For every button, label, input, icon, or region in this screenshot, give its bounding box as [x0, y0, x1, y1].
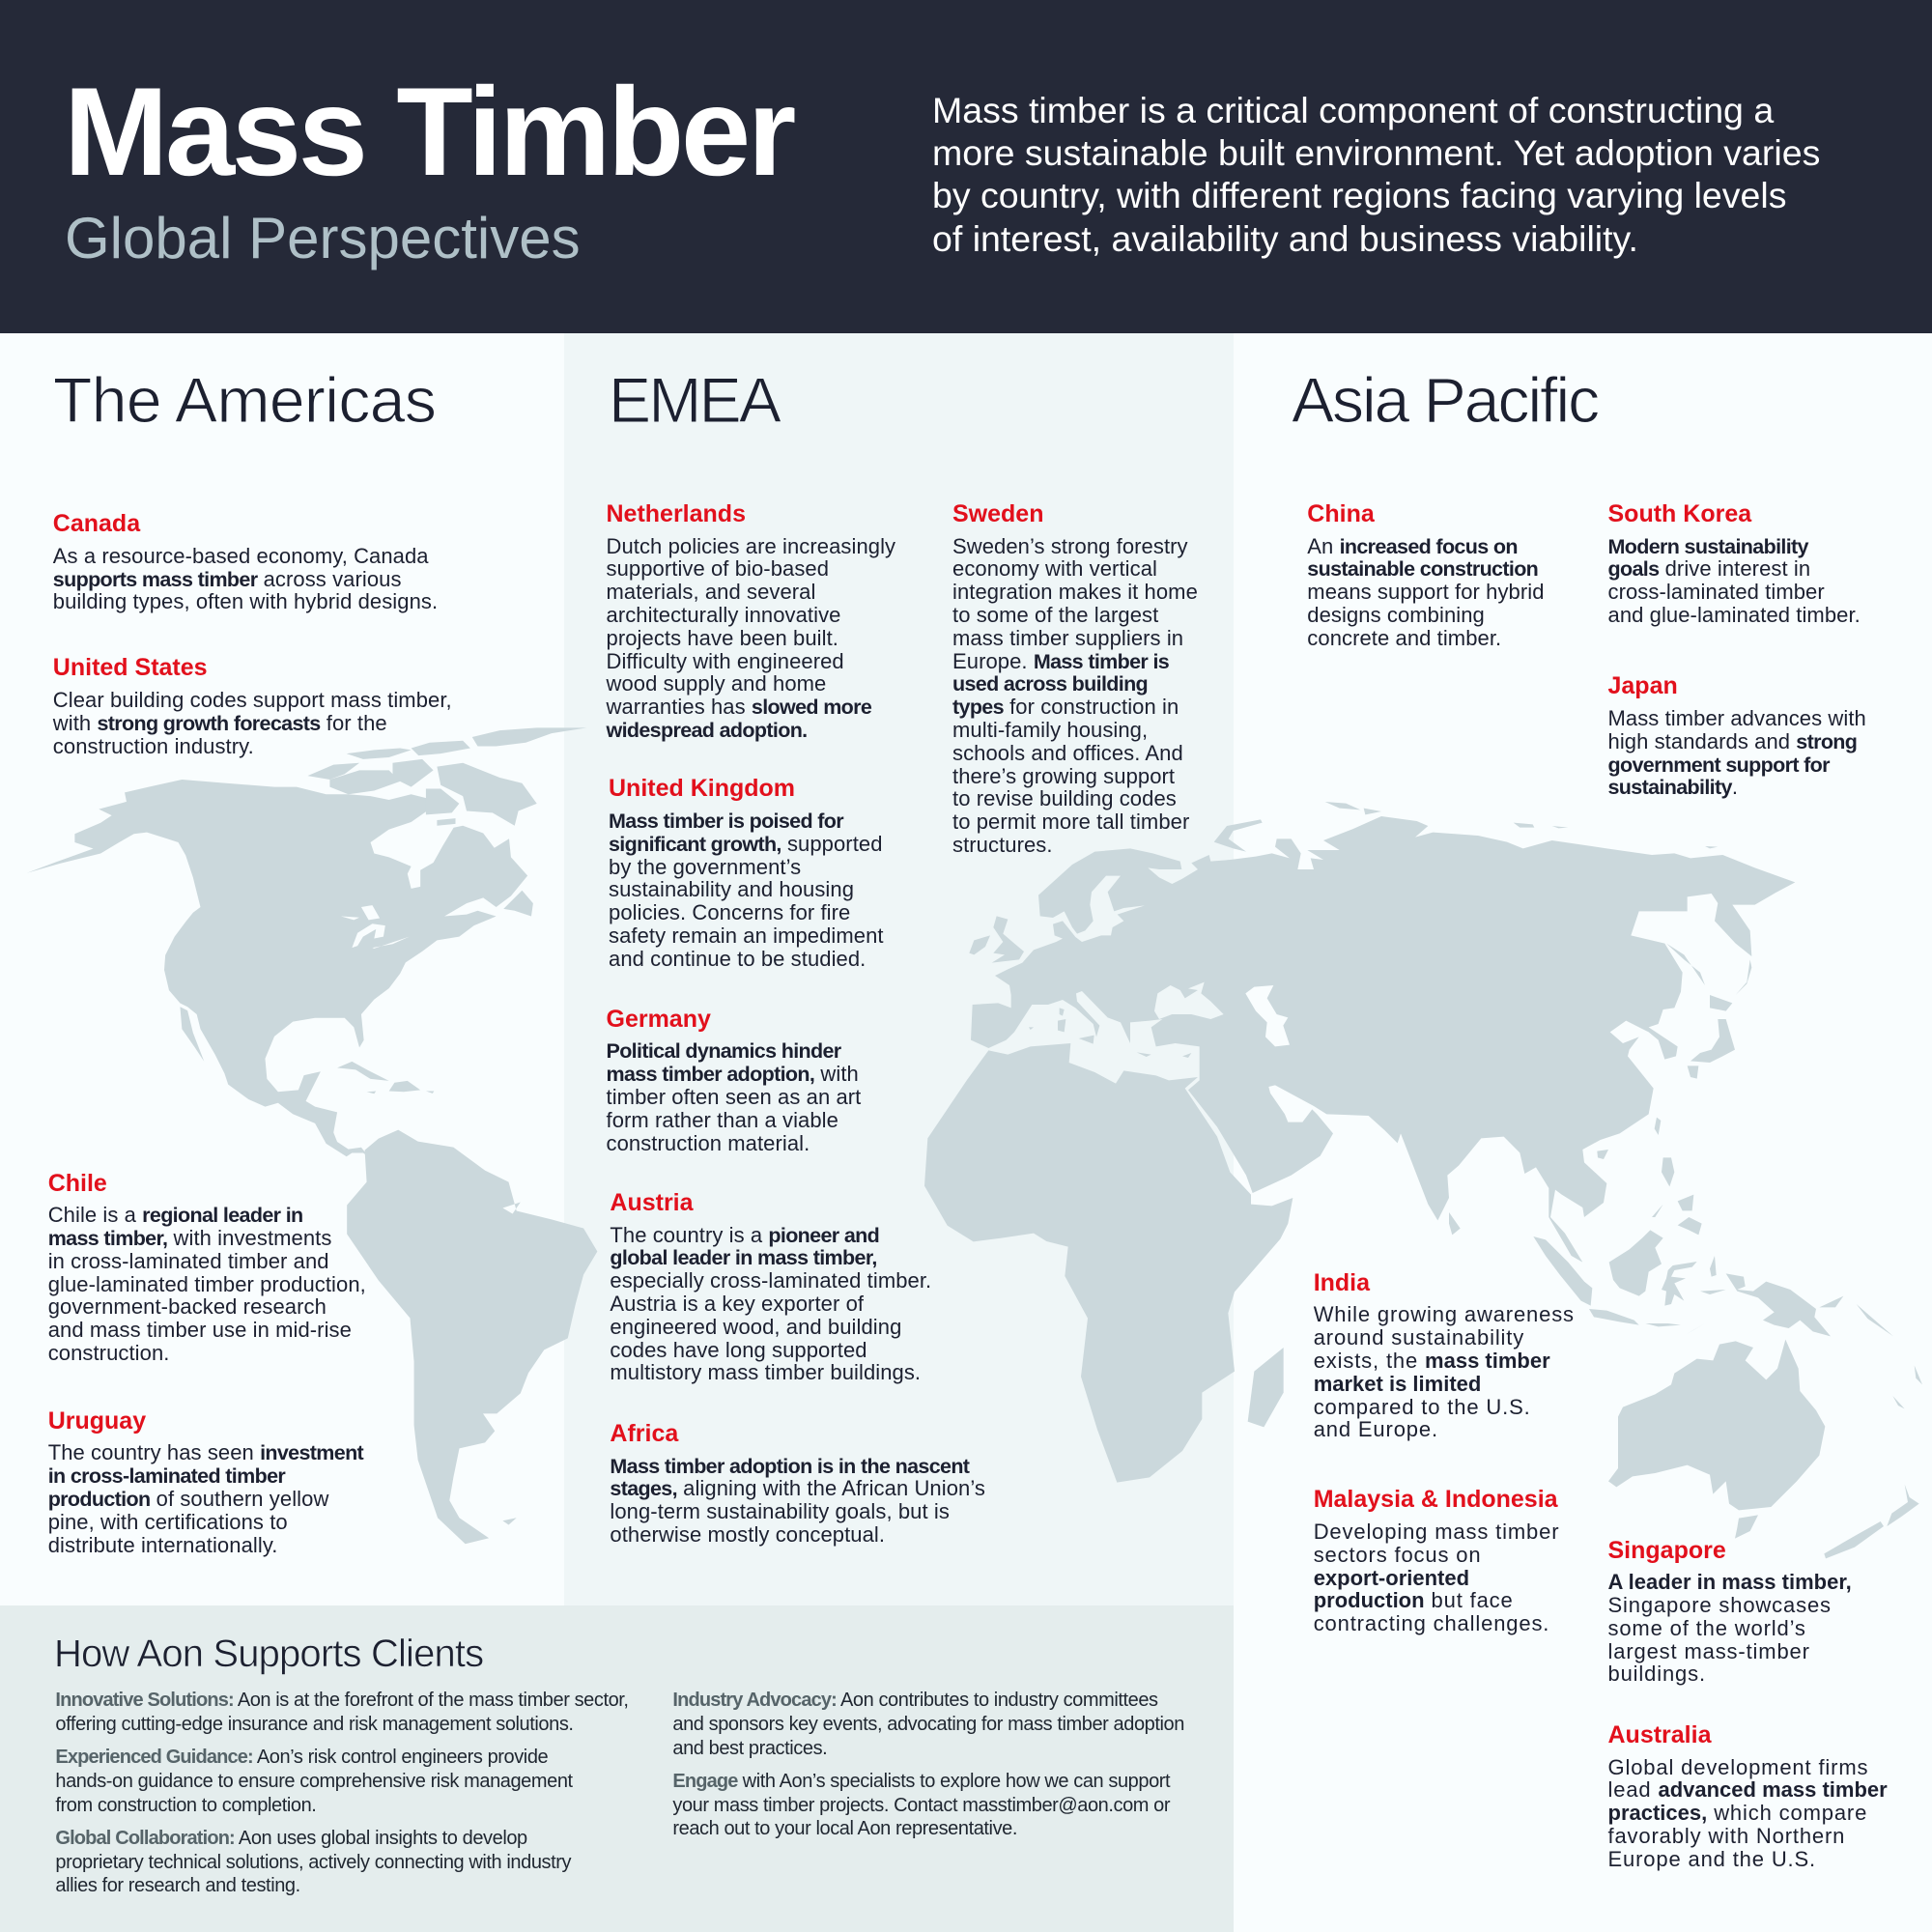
text block: Austria: Austria is a key exporter of	[610, 1292, 864, 1316]
title: Mass Timber	[64, 61, 793, 202]
text block: Chile	[48, 1169, 366, 1365]
text block: Singapore: Singapore	[1607, 1537, 1726, 1564]
text block: how Aon supports, left column: proprietary technical solutions, actively connecting with industry	[55, 1852, 571, 1873]
text block: Netherlands: Difficulty with engineered	[607, 649, 844, 673]
text block: Sweden: used across building	[952, 672, 1148, 696]
text block: South Korea: goals drive interest in	[1607, 556, 1810, 581]
text block: Austria: global leader in mass timber,	[610, 1246, 877, 1269]
intro text: Mass timber is a critical component of constructing a	[932, 90, 1774, 130]
text block: how Aon supports, right column: reach out to your local Aon representative.	[672, 1818, 1017, 1839]
heading: The Americas: The Americas	[53, 364, 436, 436]
text block: Singapore: A leader in mass timber,	[1607, 1570, 1852, 1594]
heading: How Aon Supports Clients: How Aon Supports Clients	[54, 1633, 483, 1675]
text block: South Korea	[1607, 500, 1861, 627]
heading: EMEA: EMEA	[609, 364, 779, 436]
text block: Japan: Mass timber advances with	[1607, 706, 1866, 730]
text block: Uruguay: distribute internationally.	[48, 1533, 277, 1557]
text block: Sweden: to revise building codes	[952, 786, 1177, 810]
text block: Germany: Germany	[607, 1006, 711, 1033]
text block: Sweden: schools and offices. And	[952, 741, 1183, 765]
text block: Austria	[610, 1189, 931, 1384]
text block: Malaysia and Indonesia	[1314, 1486, 1559, 1635]
text block: Japan	[1607, 672, 1866, 799]
text block: India: While growing awareness	[1314, 1302, 1575, 1326]
text block: South Korea: Modern sustainability	[1607, 535, 1808, 558]
text block: United States: Clear building codes support mass timber,	[53, 688, 452, 712]
text block: how Aon supports, left column: Global Collaboration: Aon uses global insights to develop	[55, 1828, 527, 1849]
text block: how Aon supports, left column: Experienced Guidance: Aon’s risk control engineers provide	[55, 1747, 548, 1768]
text block: Sweden: Sweden	[952, 500, 1043, 527]
text block: Australia: Global development firms	[1607, 1755, 1868, 1779]
map: South America	[347, 1130, 597, 1544]
text block: how Aon supports, right column: and best practices.	[672, 1738, 827, 1759]
text block: United States: construction industry.	[53, 734, 254, 758]
text block: Sweden	[952, 500, 1198, 857]
text block: China: means support for hybrid	[1307, 580, 1545, 604]
text block: Malaysia and Indonesia: sectors focus on	[1314, 1543, 1481, 1567]
text block: Japan: sustainability.	[1607, 775, 1738, 799]
text block: Canada: Canada	[53, 510, 140, 537]
text block: China: An increased focus on	[1307, 534, 1518, 558]
text block: United Kingdom: safety remain an impediment	[609, 923, 884, 948]
text block: Africa: long-term sustainability goals, but is	[610, 1499, 950, 1523]
text block: Singapore: largest mass-timber	[1607, 1639, 1810, 1663]
text block: how Aon supports, left column	[55, 1690, 629, 1896]
text block: Chile: and mass timber use in mid-rise	[48, 1318, 352, 1342]
text block: China: sustainable construction	[1307, 557, 1538, 581]
text block: Sweden: types for construction in	[952, 695, 1179, 719]
text block: Netherlands: supportive of bio-based	[607, 556, 829, 581]
panel: header band	[0, 0, 1932, 333]
text block: Netherlands: wood supply and home	[607, 671, 826, 696]
heading: Asia Pacific: Asia Pacific	[1292, 364, 1598, 436]
text block: Germany: timber often seen as an art	[607, 1085, 861, 1109]
text block: how Aon supports, left column: Innovative Solutions: Aon is at the forefront of the mass timber sector,	[55, 1690, 629, 1711]
text block: Chile: Chile is a regional leader in	[48, 1203, 303, 1227]
panel: EMEA background	[564, 333, 1234, 1605]
text block: China: China	[1307, 500, 1375, 527]
text block: Sweden: integration makes it home	[952, 580, 1198, 604]
text block: Japan: high standards and strong	[1607, 729, 1857, 753]
text block: how Aon supports, right column: and sponsors key events, advocating for mass timber adoption	[672, 1714, 1184, 1735]
text block: how Aon supports, left column: allies for research and testing.	[55, 1875, 300, 1896]
text block: United States: United States	[53, 654, 208, 681]
text block: Malaysia and Indonesia: contracting challenges.	[1314, 1611, 1549, 1635]
text block: Singapore: Singapore showcases	[1607, 1593, 1832, 1617]
text block: United Kingdom	[609, 775, 884, 971]
text block: Uruguay: Uruguay	[48, 1407, 146, 1435]
text block: Netherlands: materials, and several	[607, 580, 815, 604]
text block: how Aon supports, right column: Engage with Aon’s specialists to explore how we can support	[672, 1771, 1170, 1792]
text block: Netherlands: widespread adoption.	[607, 719, 808, 742]
intro text: more sustainable built environment. Yet adoption varies	[932, 132, 1820, 173]
text block: Netherlands: Netherlands	[607, 500, 746, 527]
text block: Malaysia and Indonesia: Developing mass timber	[1314, 1520, 1559, 1544]
map: Eurasia, Africa, Europe	[924, 802, 1795, 1483]
text block: Japan: Japan	[1607, 672, 1678, 699]
text block: Singapore: some of the world’s	[1607, 1616, 1806, 1640]
text block: Chile: government-backed research	[48, 1294, 327, 1319]
text block: Austria: The country is a pioneer and	[610, 1223, 879, 1247]
text block: Netherlands: Dutch policies are increasingly	[607, 534, 895, 558]
text block: Uruguay: pine, with certifications to	[48, 1510, 288, 1534]
text block: Uruguay: production of southern yellow	[48, 1487, 328, 1511]
text block: Germany: mass timber adoption, with	[607, 1062, 859, 1086]
text block: Austria: especially cross-laminated timber.	[610, 1268, 931, 1293]
text block: Sweden: structures.	[952, 833, 1053, 857]
text block: United Kingdom: United Kingdom	[609, 775, 795, 802]
text block: India: exists, the mass timber	[1314, 1349, 1550, 1373]
text block: Chile: mass timber, with investments	[48, 1226, 331, 1250]
text block: United Kingdom: Mass timber is poised for	[609, 810, 843, 833]
text block: Sweden: Europe. Mass timber is	[952, 649, 1169, 673]
text block: Canada: As a resource-based economy, Canada	[53, 544, 429, 568]
text block: South Korea: cross-laminated timber	[1607, 580, 1825, 604]
text block: how Aon supports, right column: your mass timber projects. Contact masstimber@aon.com or	[672, 1795, 1170, 1816]
map: North America	[27, 727, 586, 1156]
text block: Australia	[1607, 1721, 1888, 1871]
text block: how Aon supports, right column: Industry Advocacy: Aon contributes to industry committees	[672, 1690, 1158, 1711]
text block: Germany	[607, 1006, 862, 1155]
text block: Uruguay: in cross-laminated timber	[48, 1464, 285, 1488]
panel: how Aon supports clients background	[0, 1605, 1234, 1932]
subtitle: Global Perspectives	[65, 206, 581, 270]
text block: Australia: favorably with Northern	[1607, 1824, 1845, 1848]
text block: United States: with strong growth forecasts for the	[53, 711, 387, 735]
text block: India: and Europe.	[1314, 1417, 1438, 1441]
text block: South Korea: South Korea	[1607, 500, 1751, 527]
text block: Africa: stages, aligning with the African Union’s	[610, 1476, 985, 1500]
text block: Malaysia and Indonesia: export-oriented	[1314, 1566, 1469, 1590]
text block: Malaysia and Indonesia: Malaysia & Indonesia	[1314, 1486, 1558, 1513]
text block: Germany: construction material.	[607, 1131, 810, 1155]
text block: United Kingdom: policies. Concerns for fire	[609, 900, 850, 924]
text block: how Aon supports, left column: hands-on guidance to ensure comprehensive risk management	[55, 1771, 573, 1792]
text block: Germany: form rather than a viable	[607, 1108, 838, 1132]
text block: Netherlands	[607, 500, 895, 742]
text block: Singapore: buildings.	[1607, 1662, 1706, 1686]
text block: Chile: Chile	[48, 1169, 107, 1196]
text block: Sweden: economy with vertical	[952, 556, 1157, 581]
text block: Germany: Political dynamics hinder	[607, 1039, 841, 1063]
text block: Sweden: to permit more tall timber	[952, 810, 1189, 834]
map: East Asian islands	[1449, 823, 1751, 1235]
text block: Japan: government support for	[1607, 753, 1830, 777]
text block: Sweden: there’s growing support	[952, 764, 1175, 788]
text block: Netherlands: architecturally innovative	[607, 603, 840, 627]
text block: Australia: lead advanced mass timber	[1607, 1777, 1888, 1802]
text block: Canada: supports mass timber across various	[53, 567, 402, 591]
map: Southeast Asia and Oceania	[1533, 1230, 1922, 1558]
text block: Africa: otherwise mostly conceptual.	[610, 1522, 885, 1547]
text block: Canada: building types, often with hybrid designs.	[53, 589, 438, 613]
text block: Austria: engineered wood, and building	[610, 1315, 901, 1339]
text block: China: designs combining	[1307, 603, 1485, 627]
text block: Singapore	[1607, 1537, 1852, 1686]
text block: United Kingdom: and continue to be studied.	[609, 947, 866, 971]
text block: how Aon supports, left column: offering cutting-edge insurance and risk management solutions.	[55, 1714, 574, 1735]
text block: how Aon supports, right column	[672, 1690, 1184, 1839]
text block: Austria: codes have long supported	[610, 1338, 867, 1362]
text block: Austria: Austria	[610, 1189, 694, 1216]
text block: how Aon supports, left column: from construction to completion.	[55, 1795, 316, 1816]
text block: Australia: Europe and the U.S.	[1607, 1847, 1816, 1871]
text block: Austria: multistory mass timber buildings.	[610, 1360, 921, 1384]
text block: China	[1307, 500, 1545, 650]
text block: Canada	[52, 510, 438, 613]
text block: Netherlands: projects have been built.	[607, 626, 838, 650]
text block: Netherlands: warranties has slowed more	[607, 695, 871, 719]
intro text: of interest, availability and business viability.	[932, 218, 1638, 259]
text block: India: around sustainability	[1314, 1325, 1524, 1350]
text block: Malaysia and Indonesia: production but face	[1314, 1588, 1514, 1612]
text block: Chile: construction.	[48, 1341, 169, 1365]
text block: India: market is limited	[1314, 1372, 1481, 1396]
text block: United Kingdom: sustainability and housing	[609, 877, 854, 901]
text block: Africa: Africa	[610, 1420, 678, 1447]
text block: Sweden: Sweden’s strong forestry	[952, 534, 1188, 558]
text block: South Korea: and glue-laminated timber.	[1607, 603, 1861, 627]
text block: India: compared to the U.S.	[1314, 1395, 1531, 1419]
text block: Uruguay: The country has seen investment	[48, 1440, 363, 1464]
intro text	[932, 90, 1820, 259]
text block: Sweden: mass timber suppliers in	[952, 626, 1183, 650]
text block: India: India	[1314, 1269, 1370, 1296]
text block: Africa	[610, 1420, 985, 1547]
text block: Sweden: multi-family housing,	[952, 718, 1148, 742]
text block: Sweden: to some of the largest	[952, 603, 1158, 627]
text block: Australia: Australia	[1607, 1721, 1711, 1748]
text block: United States	[52, 654, 452, 758]
text block: India	[1314, 1269, 1575, 1441]
text block: Chile: glue-laminated timber production,	[48, 1272, 366, 1296]
text block: United Kingdom: significant growth, supported	[609, 832, 883, 856]
text block: Uruguay	[48, 1407, 363, 1557]
text block: China: concrete and timber.	[1307, 626, 1501, 650]
text block: Chile: in cross-laminated timber and	[48, 1249, 329, 1273]
intro text: by country, with different regions facing varying levels	[932, 175, 1786, 215]
text block: Australia: practices, which compare	[1607, 1801, 1867, 1825]
text block: Africa: Mass timber adoption is in the nascent	[610, 1455, 969, 1478]
text block: United Kingdom: by the government’s	[609, 855, 801, 879]
